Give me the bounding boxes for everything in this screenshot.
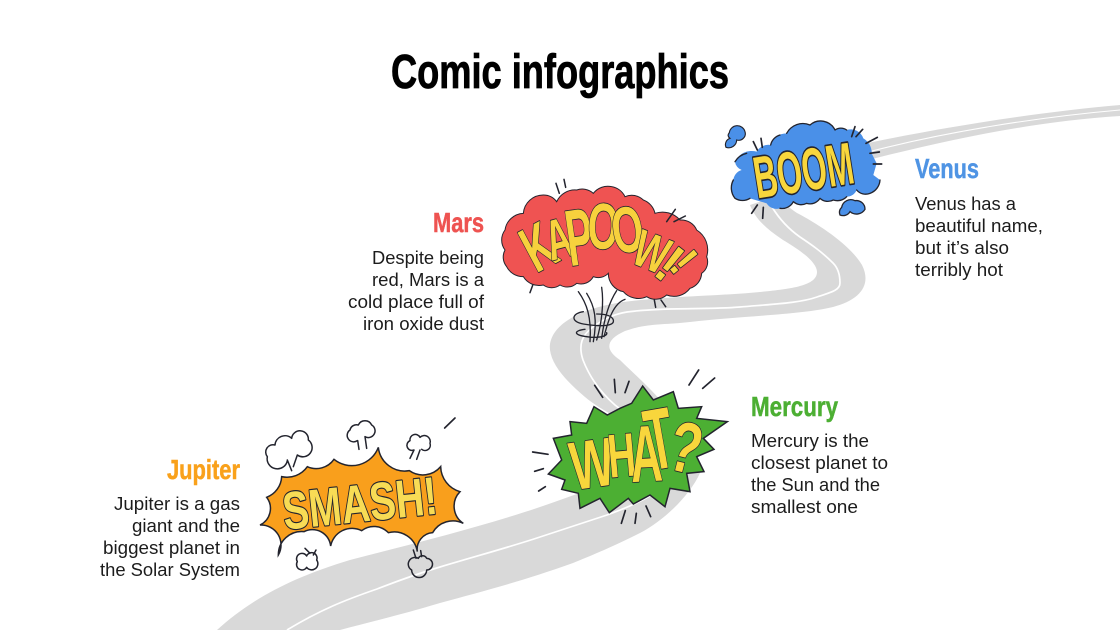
body: terribly hot (915, 260, 1003, 280)
swirl smoke (574, 287, 625, 342)
heading: Jupiter (167, 454, 240, 485)
letters: P (560, 192, 599, 284)
puffs (725, 126, 745, 148)
burst shape (502, 186, 708, 299)
body: giant and the (132, 516, 240, 536)
body: closest planet to (751, 453, 888, 473)
body: the Solar System (100, 560, 240, 580)
smoke puffs (266, 431, 312, 471)
winding road (217, 105, 1120, 630)
body: cold place full of (348, 292, 485, 312)
body: Mercury is the (751, 431, 869, 451)
action lines (530, 179, 685, 307)
comic burst: SMASH (260, 418, 463, 577)
letters: W (625, 220, 678, 286)
burst shape (548, 386, 727, 513)
comic burst: BOOM (725, 121, 882, 218)
word: ? (660, 405, 710, 491)
body: Despite being (372, 248, 484, 268)
burst shape (731, 121, 880, 209)
word: BOOM (749, 130, 858, 211)
title: Comic infographics (391, 46, 729, 99)
text block: Mercury (751, 391, 888, 517)
body: smallest one (751, 497, 858, 517)
burst shape (260, 447, 463, 555)
letters: ! (660, 241, 707, 284)
burst outline (731, 121, 880, 209)
text block: Jupiter (100, 454, 240, 580)
word: SMASH! (280, 467, 440, 542)
word: A (628, 409, 664, 499)
body: red, Mars is a (372, 270, 485, 290)
letters: O (607, 192, 648, 268)
letters: A (538, 204, 579, 273)
word (565, 388, 710, 505)
word: H (605, 420, 638, 491)
comic burst: KAPOOW (502, 179, 708, 342)
body: beautiful name, (915, 216, 1043, 236)
letters (509, 190, 707, 294)
text block: Venus (915, 153, 1043, 280)
heading: Mercury (751, 391, 838, 422)
body: Venus has a (915, 194, 1017, 214)
action lines (533, 370, 715, 523)
body: but it’s also (915, 238, 1009, 258)
body: iron oxide dust (363, 314, 484, 334)
text block: Mars (348, 207, 485, 334)
letters: ! (644, 235, 694, 294)
body: Jupiter is a gas (114, 494, 240, 514)
word: W (565, 424, 620, 505)
heading: Venus (915, 153, 979, 184)
body: biggest planet in (103, 538, 240, 558)
letters: K (509, 209, 569, 286)
body: the Sun and the (751, 475, 880, 495)
letters: O (586, 190, 620, 264)
heading: Mars (433, 207, 484, 238)
comic burst: WHAT? (533, 370, 727, 523)
word: T (637, 388, 681, 489)
action lines (752, 127, 882, 218)
